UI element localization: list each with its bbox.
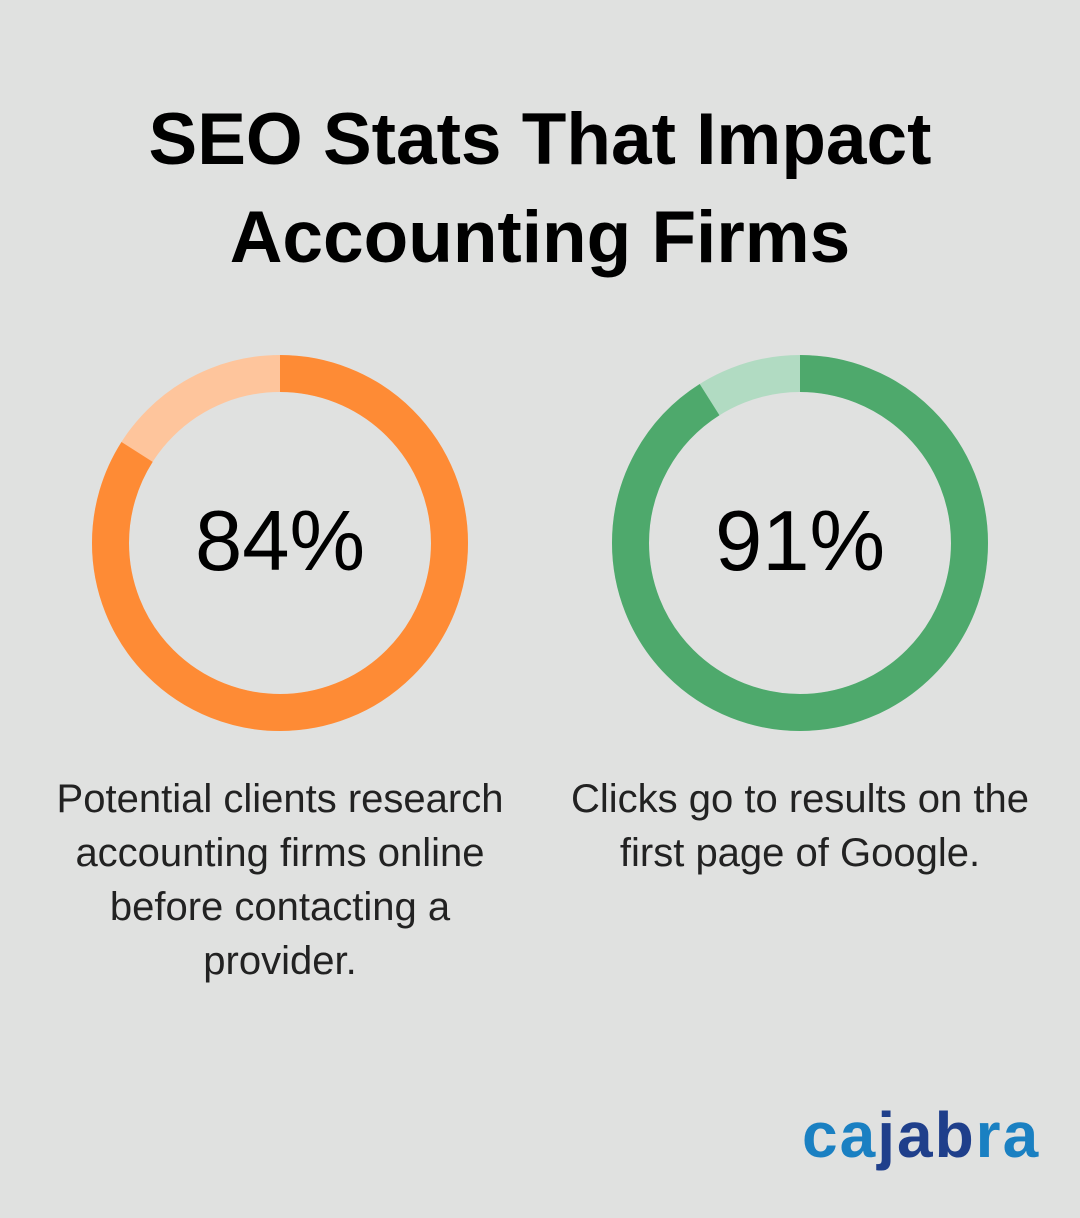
donut chart: 91% bbox=[612, 355, 988, 731]
logo: cajabra bbox=[802, 1099, 1040, 1171]
text: 91% description: Clicks go to results on the first page of Google. bbox=[571, 777, 1029, 875]
donut chart: 84%: 84% bbox=[195, 494, 365, 589]
title bbox=[149, 99, 931, 278]
donut chart: 91%: 91% bbox=[715, 494, 885, 589]
title: Accounting Firms bbox=[230, 197, 850, 278]
title: SEO Stats That Impact bbox=[149, 99, 931, 180]
donut chart: 84% bbox=[92, 355, 468, 731]
text: 84% description: Potential clients research accounting firms online before contacting a provider. bbox=[57, 777, 503, 983]
